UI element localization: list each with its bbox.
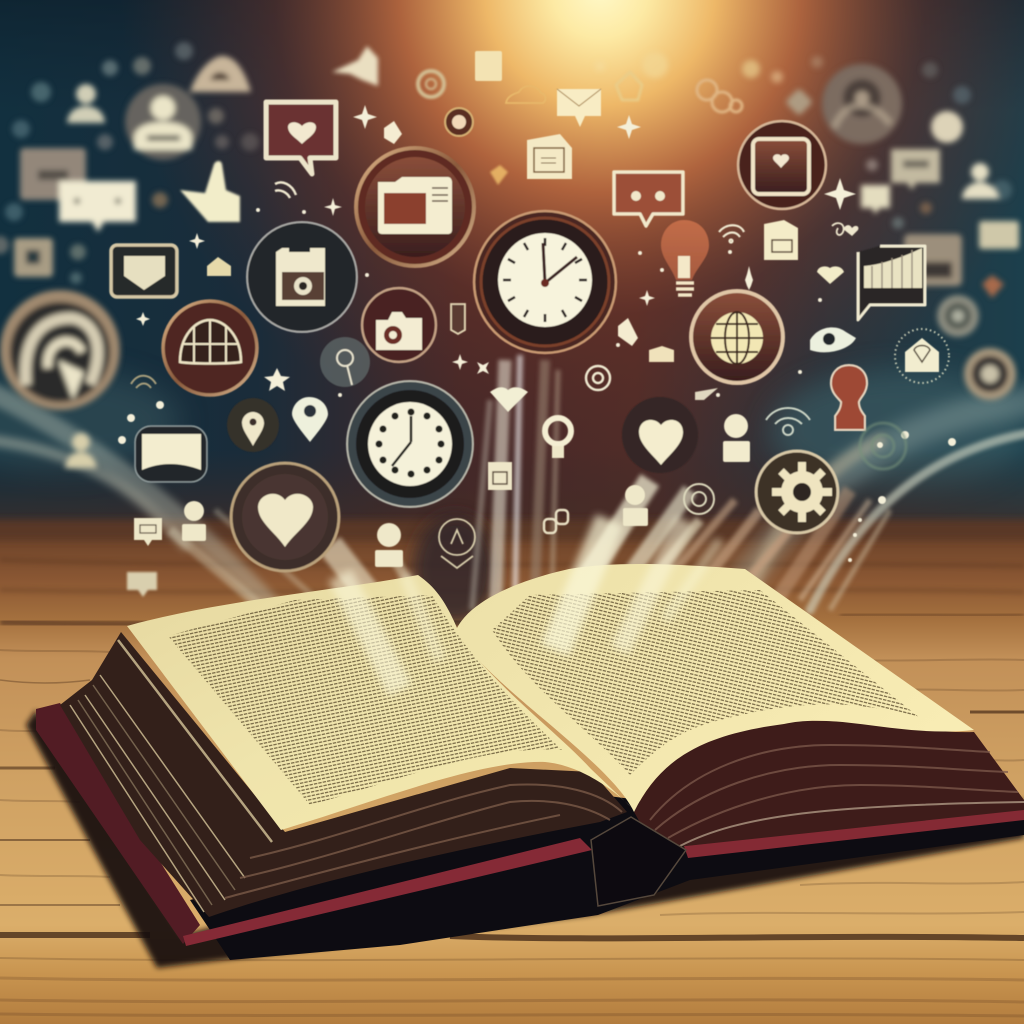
- icon: target small: [586, 366, 610, 390]
- icon: clock large: [474, 211, 616, 353]
- icon: small mail left: [207, 257, 231, 276]
- blurred distant icons right: [65, 52, 1019, 468]
- icon: seal A: [439, 519, 475, 568]
- spine: [591, 817, 686, 906]
- icon: chat bubble front: [59, 181, 136, 232]
- icon: person far left: [67, 84, 105, 123]
- icon: hexagon badge: [616, 72, 642, 100]
- bokeh dots left: [0, 42, 259, 284]
- icon: chat bubble right: [891, 149, 940, 190]
- icon: document top: [475, 51, 502, 81]
- swoosh light streams: [0, 392, 1024, 650]
- icon: ring low: [684, 484, 714, 514]
- icon: person right mid: [723, 414, 750, 462]
- icon: small tag left: [451, 304, 465, 334]
- icon: tag small: [695, 388, 718, 400]
- icon: bar chart bubble: [858, 246, 925, 320]
- icon: colored ring: [445, 108, 473, 136]
- icon: target left: [0, 290, 120, 410]
- icon: loop and heart: [832, 223, 858, 236]
- left page stack: [60, 632, 627, 917]
- icon: chat bubble far right: [979, 221, 1019, 249]
- icon: dark pin bubble: [227, 398, 279, 452]
- sparkles and tiny dots: [118, 105, 956, 562]
- icon: person badge: [125, 84, 201, 160]
- book shadow: [26, 710, 1024, 968]
- icon: pin outline: [292, 397, 328, 442]
- icon: mini heart: [817, 266, 844, 284]
- wooden table: [0, 520, 1024, 1024]
- left page: [127, 575, 634, 830]
- book: [36, 564, 1024, 960]
- icon: pin envelope dotted: [895, 329, 949, 383]
- icon: document right: [764, 220, 798, 260]
- cover dark underside: [190, 795, 1024, 960]
- blurred distant icons left: [0, 42, 259, 410]
- right stack lines: [650, 745, 1024, 846]
- icon: globe right badge: [689, 289, 785, 385]
- icon: framed heart bubble top: [266, 102, 336, 174]
- icon: clock lower: [347, 381, 473, 507]
- icon: cloud outline: [506, 86, 545, 103]
- icon: blank bubble: [135, 426, 207, 482]
- right page text: [492, 590, 920, 775]
- right page: [456, 564, 974, 812]
- icon: globe left badge: [163, 301, 257, 395]
- icon: mail small right: [649, 346, 674, 362]
- icon: sun flare: [490, 165, 508, 185]
- icon: camera small badge: [362, 288, 436, 362]
- foreground icons: [111, 46, 956, 597]
- cover strip: [183, 838, 592, 946]
- icon: pin hole: [304, 405, 316, 417]
- bottom stack lines: [225, 784, 622, 898]
- icon: small square: [14, 238, 53, 277]
- icon: framed heart circle: [738, 121, 826, 209]
- icon: hill cloud: [190, 56, 251, 92]
- icon: person top right ball: [931, 111, 963, 143]
- page glow streaks over pages: [340, 520, 720, 690]
- icon: top bird shape: [332, 46, 378, 86]
- icon: chain rings: [697, 80, 742, 112]
- icon: person left mid: [182, 501, 206, 541]
- icon: rings center: [544, 510, 568, 533]
- icon: envelope: [557, 89, 601, 127]
- icon: person left low: [65, 433, 97, 468]
- icon: small chat: [861, 185, 890, 214]
- bokeh dots right: [595, 52, 1012, 229]
- icon: gear badge far right: [964, 348, 1016, 400]
- icon: heart dark badge: [622, 397, 698, 473]
- icon: wavy arcs: [766, 408, 810, 435]
- left page text: [168, 595, 562, 805]
- icon: pointing hand: [180, 161, 240, 222]
- dark patch behind book centre: [413, 515, 497, 625]
- icon: person lower mid: [623, 485, 648, 526]
- cover strip right: [684, 808, 1024, 858]
- icon: hand small right: [618, 318, 638, 346]
- icon: gear badge: [756, 451, 838, 533]
- icon: eye: [810, 327, 856, 352]
- icon: faded pin bubble: [320, 337, 370, 387]
- icon: chat bubble dots: [614, 172, 683, 226]
- left stack page edges: [70, 640, 272, 912]
- icon: ring small: [418, 71, 444, 97]
- icon: person right: [962, 163, 999, 199]
- icon: document center: [527, 134, 572, 179]
- icon: red heart far right: [982, 275, 1004, 298]
- icon: small chat lower: [127, 572, 157, 597]
- right page stack: [634, 721, 1024, 846]
- cover left edge: [36, 703, 200, 944]
- icon: wifi left: [131, 376, 156, 388]
- icon: heart badge left: [231, 463, 339, 571]
- icon: chat box back: [20, 148, 86, 200]
- icon: small hand: [384, 121, 402, 144]
- icon: framed chart back: [904, 234, 962, 286]
- icon: person center left: [375, 523, 403, 567]
- icon: camera in gold ring: [356, 148, 474, 266]
- icon: glass camera bubble: [247, 222, 357, 332]
- icon: envelope frame left: [111, 245, 177, 297]
- icon: bulb ring center: [545, 418, 571, 458]
- icon: heart center: [490, 387, 528, 412]
- icon: wifi: [719, 225, 744, 242]
- icon: gray target top right: [822, 64, 902, 144]
- icon: small chat left low: [134, 518, 162, 546]
- page light rays behind book: [170, 355, 890, 660]
- icon: diamond: [785, 88, 813, 116]
- icon: concentric right: [937, 295, 979, 337]
- icon: note small: [488, 462, 512, 490]
- icon: light bulb: [661, 220, 709, 295]
- icon: wifi small: [275, 182, 296, 198]
- icon: faded ring right: [860, 423, 906, 469]
- icon: keyhole person: [831, 365, 867, 430]
